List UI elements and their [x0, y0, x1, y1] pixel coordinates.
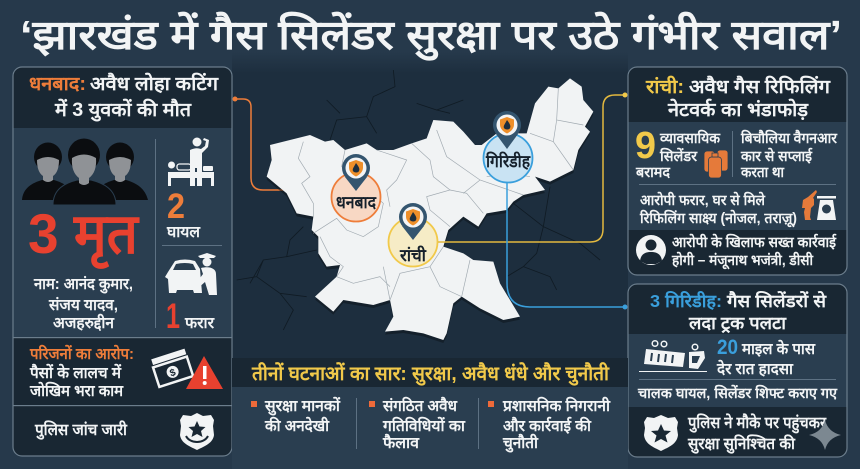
icon: three victims [22, 138, 148, 205]
fled count: फरार [184, 315, 215, 332]
fled count: 1 [166, 297, 180, 336]
victim names: नाम: आनंद कुमार, [33, 275, 133, 294]
icon: nozzle and scale [802, 190, 836, 220]
victim names [33, 275, 133, 332]
middleman supply note: कार से सप्लाई [740, 147, 813, 165]
marker: Dhanbad: धनबाद [336, 193, 377, 212]
Giridih heading: 3 गिरिडीह: [650, 290, 722, 311]
police investigation: पुलिस जांच जारी [34, 420, 128, 440]
icon: police badge [644, 415, 678, 451]
marker: Ranchi [388, 203, 438, 266]
accident location: देर रात हादसा [716, 359, 794, 378]
official statement: आरोपी के खिलाफ सख्त कार्रवाई [672, 233, 837, 251]
summary panel [232, 358, 628, 469]
family allegation [29, 344, 134, 400]
point: organized illegal activity: संगठित अवैध [382, 396, 458, 415]
official statement [671, 233, 837, 270]
connector: Dhanbad [235, 99, 333, 190]
accident location: माइल के पास [741, 339, 816, 358]
icon: gas cylinders [704, 150, 728, 178]
Giridih heading: लदा ट्रक पलटा [688, 313, 788, 334]
deaths count: 3 मृत [28, 202, 140, 269]
injured count: 2 [167, 187, 185, 226]
point: safety standards: की अनदेखी [264, 416, 330, 435]
accident location: 20 [717, 336, 738, 359]
cylinders recovered: 9 [635, 125, 656, 167]
icon: sparkle [809, 420, 841, 450]
cylinders recovered: बरामद [635, 165, 671, 181]
icon: money and warning [149, 348, 223, 389]
driver note: चालक घायल, सिलेंडर शिफ्ट कराए गए [637, 384, 838, 402]
Ranchi heading: नेटवर्क का भंडाफोड़ [667, 98, 809, 121]
connector: Ranchi [438, 95, 625, 242]
point: organized illegal activity: गतिविधियों का [382, 416, 466, 435]
middleman supply note: बिचौलिया वैगनआर [740, 129, 838, 147]
point: administrative oversight [488, 396, 611, 453]
police response: सुरक्षा सुनिश्चित की [687, 434, 796, 454]
Dhanbad heading: धनबाद: [29, 74, 86, 95]
Ranchi heading: रांची: [645, 75, 684, 98]
middleman supply note: करता था [740, 165, 785, 181]
connector: Giridih [507, 183, 625, 307]
panel: Dhanbad [13, 67, 232, 456]
icon: police badge [180, 413, 214, 450]
panel: Giridih [628, 284, 847, 457]
marker: Giridih [484, 111, 532, 182]
connector dot: Ranchi [622, 92, 628, 98]
point: organized illegal activity [369, 396, 466, 452]
map of Jharkhand [267, 78, 593, 343]
point: safety standards: सुरक्षा मानकों [264, 396, 341, 416]
Dhanbad heading: अवैध लोहा कटिंग [90, 72, 219, 95]
middleman supply note [740, 129, 838, 181]
marker: Dhanbad [332, 154, 380, 222]
Giridih heading: गैस सिलेंडरों से [726, 290, 827, 311]
accused absconding note: आरोपी फरार, घर से मिले [640, 191, 766, 209]
police response: पुलिस ने मौके पर पहुंचकर [687, 413, 827, 434]
Dhanbad heading [29, 72, 219, 122]
icon: injured person on bed [168, 138, 214, 186]
family allegation: परिजनों का आरोप: [29, 344, 134, 363]
point: organized illegal activity: फैलाव [382, 433, 420, 452]
connector dot: Giridih [622, 304, 628, 310]
Ranchi heading [645, 75, 831, 121]
injured count [166, 187, 201, 241]
injured count: घायल [166, 224, 201, 241]
point: safety standards [251, 396, 341, 435]
marker: Ranchi: रांची [399, 245, 427, 265]
fled count [166, 297, 215, 336]
cylinders recovered: सिलेंडर [659, 147, 698, 165]
icon: overturned truck [639, 341, 707, 372]
icon: car and police officer [165, 253, 217, 295]
panel: Ranchi [628, 67, 847, 275]
connector dot: Dhanbad [232, 96, 238, 102]
family allegation: पैसों के लालच में [29, 363, 122, 382]
accident location [716, 336, 816, 378]
accused absconding note: रिफिलिंग साक्ष्य (नोजल, तराज़ू) [639, 209, 797, 228]
icon: money and warning: $ [169, 367, 178, 379]
victim names: अजहरुद्दीन [53, 313, 115, 332]
Giridih heading [650, 290, 827, 334]
official statement: होगी – मंजूनाथ भजंत्री, डीसी [671, 251, 814, 270]
Ranchi heading: अवैध गैस रिफिलिंग [689, 75, 831, 98]
marker: Giridih: गिरिडीह [485, 151, 531, 171]
title: ‘झारखंड में गैस सिलेंडर सुरक्षा पर उठे गंभीर सवाल’ [20, 11, 842, 61]
victim names: संजय यादव, [48, 296, 118, 314]
police response [687, 413, 827, 454]
point: administrative oversight: चुनौती [502, 433, 539, 453]
cylinders recovered: व्यावसायिक [659, 129, 721, 147]
icon: official avatar [636, 235, 666, 265]
Dhanbad heading: में 3 युवकों की मौत [54, 98, 192, 122]
accused absconding note [639, 191, 797, 228]
point: administrative oversight: और कार्रवाई की [503, 416, 592, 435]
family allegation: जोखिम भरा काम [29, 381, 124, 400]
summary heading: तीनों घटनाओं का सार: सुरक्षा, अवैध धंधे और चुनौती [251, 362, 610, 386]
point: administrative oversight: प्रशासनिक निगरानी [502, 396, 611, 415]
cylinders recovered [635, 125, 721, 181]
